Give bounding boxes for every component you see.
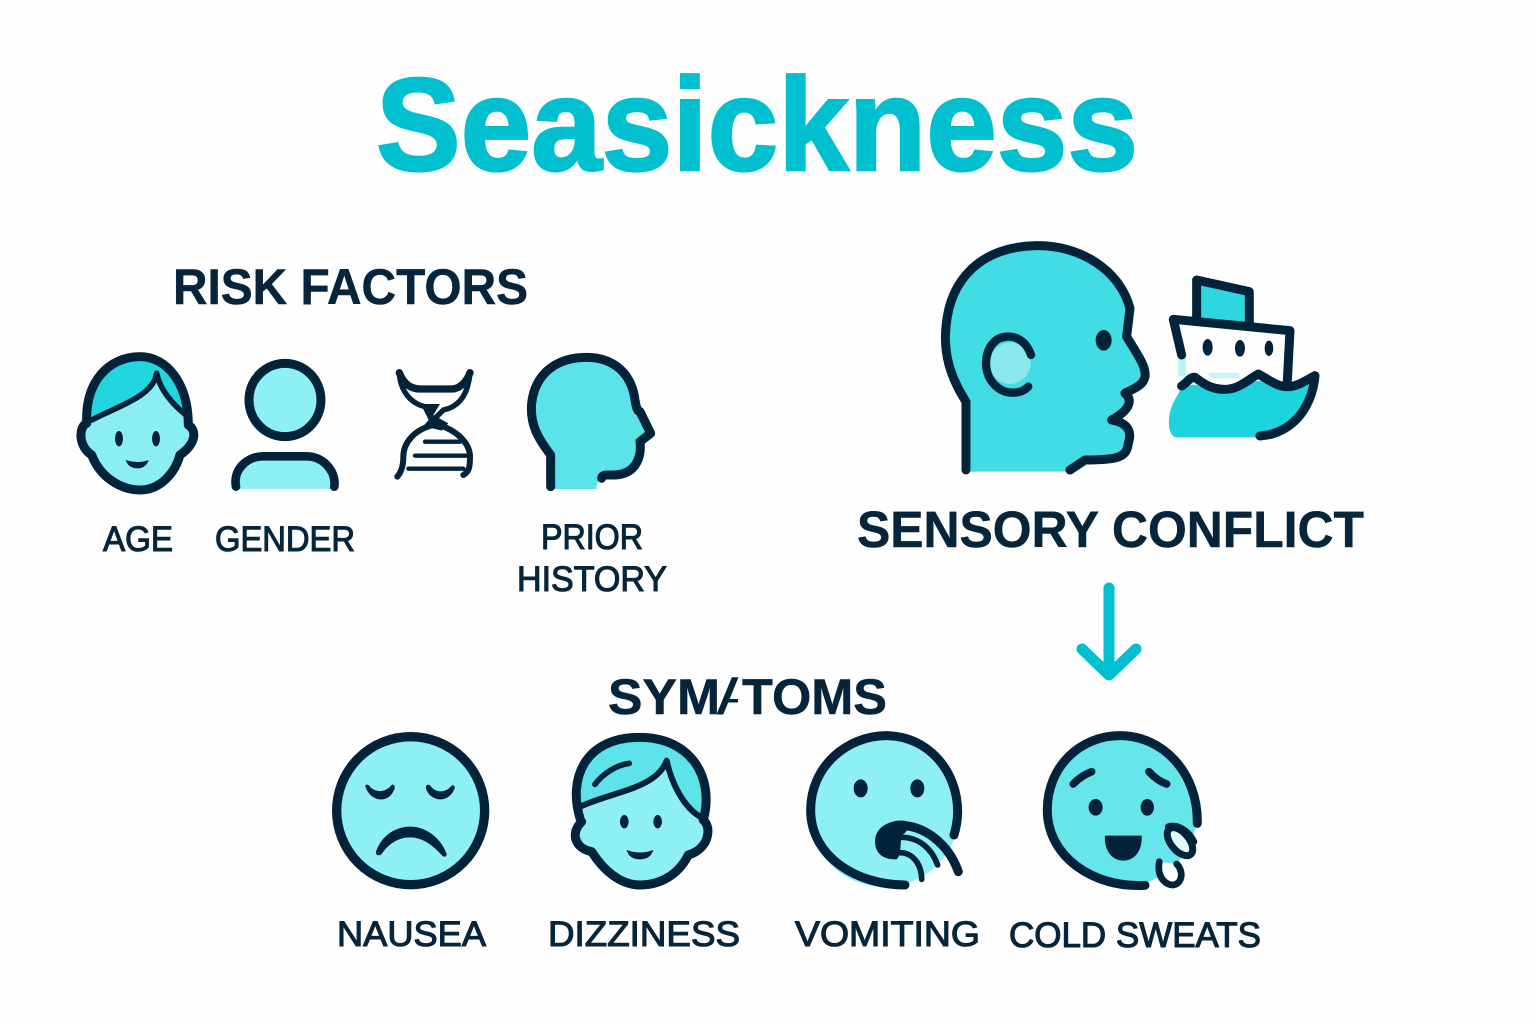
label: dizziness: DIZZINESS — [548, 915, 740, 954]
heading: symptoms: TOMS — [742, 669, 887, 725]
heading: sensory conflict: SENSORY CONFLICT — [857, 501, 1364, 558]
panel: symptoms — [337, 669, 1261, 955]
arrow: conflict leads to symptoms — [1082, 588, 1136, 675]
title: Seasickness — [376, 51, 1138, 198]
icon: dna helix — [397, 373, 470, 477]
label: cold sweats: COLD SWEATS — [1009, 916, 1261, 955]
label: vomiting: VOMITING — [795, 915, 980, 954]
icon: gender person — [235, 363, 335, 489]
heading: symptoms: SYM — [608, 669, 720, 725]
panel: risk factors — [81, 259, 667, 599]
label: age: AGE — [103, 520, 173, 559]
icon: prior history head — [531, 357, 651, 489]
label: gender: GENDER — [215, 520, 355, 559]
heading: symptoms — [608, 669, 887, 725]
panel: sensory conflict — [857, 246, 1364, 675]
icon: age face — [81, 357, 194, 490]
icon: head in profile — [945, 246, 1145, 472]
label: prior history: PRIOR — [541, 518, 643, 557]
icon: vomiting face — [809, 736, 959, 887]
icon: dizziness face — [574, 737, 708, 885]
icon: ship on waves — [1169, 280, 1315, 437]
label: prior history — [517, 518, 667, 599]
icon: cold sweats face — [1047, 736, 1198, 886]
label: prior history: HISTORY — [517, 560, 667, 599]
label: nausea: NAUSEA — [337, 915, 487, 954]
icon: nausea face — [337, 737, 485, 885]
heading: risk factors: RISK FACTORS — [173, 259, 528, 315]
heading: symptoms: / — [717, 669, 738, 725]
